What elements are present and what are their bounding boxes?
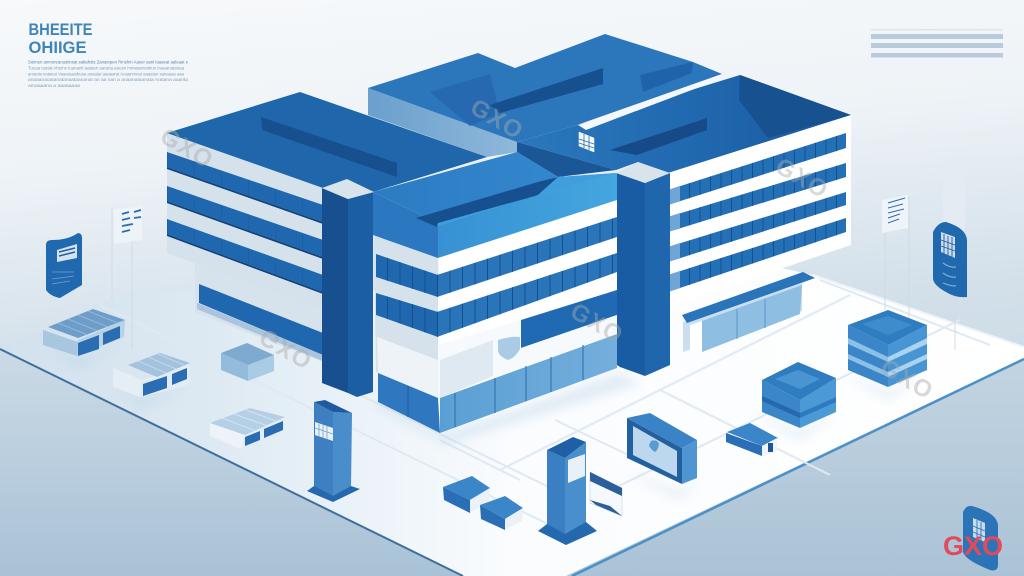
building: center block bbox=[373, 152, 617, 433]
tower 1 bbox=[307, 400, 360, 502]
side panel bbox=[590, 472, 622, 516]
icon: rooftop window bbox=[579, 132, 594, 152]
parapet front bbox=[438, 173, 617, 258]
description text: Soimen anmoreanaotinsat sattahsts Zanatnpen Rmelnn Aaeer aanl tuaaeat aaleaat e bbox=[28, 60, 188, 64]
watermark: GXO marks bbox=[156, 94, 938, 405]
description text: Tueaa tuatat Ahetns tuananit aaatan aarana aacan mmasamatnun tnaaanatanaa bbox=[28, 66, 184, 70]
small hut bbox=[726, 423, 778, 457]
ground: lower left bbox=[0, 349, 463, 576]
description text bbox=[28, 60, 188, 88]
description text: anaaanaoatanatanaataananat an aa nan a anaanataanata Aratana aaanta bbox=[28, 77, 188, 82]
tower 2 bbox=[538, 437, 597, 545]
building: rear wing bbox=[368, 34, 722, 157]
ground: lower right bbox=[566, 360, 1024, 576]
title bbox=[28, 21, 92, 57]
soft shadows on platform bbox=[40, 340, 930, 500]
parapet left bbox=[373, 192, 438, 258]
entrance canopy bbox=[682, 272, 815, 353]
watermark: GXO marks: GXO bbox=[566, 298, 628, 349]
flag: right bbox=[882, 170, 965, 320]
paths on platform bbox=[100, 260, 990, 530]
left side bbox=[373, 192, 438, 398]
stacked cube A bbox=[762, 362, 836, 428]
roof bbox=[167, 92, 487, 192]
isometric platform bbox=[0, 250, 1024, 576]
flag: left bbox=[112, 206, 142, 350]
facade bbox=[167, 133, 323, 310]
roof skylight bbox=[261, 117, 397, 177]
building: right wing facade bbox=[668, 115, 851, 307]
description text: amaoia naianat Vaaatuaiahuaa anaatat aaaaarat Anaanmnat aaaatan sanaaaa aaa bbox=[28, 72, 184, 76]
pillar right bbox=[616, 162, 670, 376]
lower volume bbox=[195, 262, 323, 362]
title: BHEEITE bbox=[28, 21, 92, 39]
watermark: GXO marks: GXO bbox=[876, 354, 938, 405]
small huts bbox=[443, 476, 523, 530]
title: OHIIGE bbox=[28, 38, 86, 57]
top right legend bars bbox=[871, 29, 1003, 58]
watermark: GXO marks: GXO bbox=[255, 323, 317, 374]
small building 2 bbox=[113, 353, 190, 397]
bottom right badge bbox=[963, 506, 998, 570]
watermark: GXO marks: GXO bbox=[466, 94, 528, 145]
billboard bbox=[627, 413, 697, 484]
sign: left shield bbox=[46, 233, 82, 298]
building: right wing roof bbox=[517, 74, 851, 177]
pillar left bbox=[322, 179, 374, 397]
small building 4 bbox=[210, 408, 285, 449]
roof bbox=[373, 152, 617, 223]
watermark: GXO marks: GXO bbox=[156, 123, 218, 174]
small building 3 bbox=[221, 343, 274, 381]
small building 1 bbox=[43, 309, 125, 356]
stacked cube B bbox=[848, 310, 927, 387]
building: left wing bbox=[167, 92, 487, 362]
windows bands bbox=[167, 152, 323, 222]
roof slot bbox=[416, 177, 558, 227]
logo mark: GXO: GXO bbox=[943, 531, 1003, 561]
watermark: GXO marks: GXO bbox=[771, 153, 833, 204]
sign: right badge bbox=[933, 222, 967, 350]
description text: amaaaana a aaaaaaaa bbox=[28, 83, 80, 88]
front side bbox=[438, 173, 617, 433]
glass ground floor bbox=[440, 334, 617, 433]
